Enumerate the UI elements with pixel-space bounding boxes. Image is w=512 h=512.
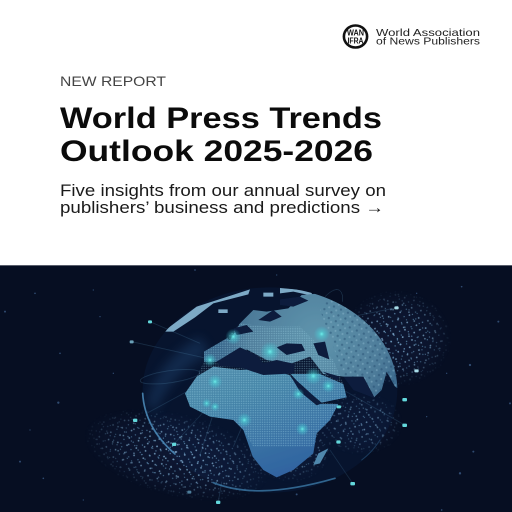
continent: Arabia	[291, 374, 347, 403]
title	[60, 102, 382, 168]
subtitle: publishers’ business and predictions →	[60, 198, 384, 217]
title: Outlook 2025-2026	[60, 135, 373, 168]
logo: WAN-IFRA: IFRA	[348, 36, 364, 46]
subtitle	[60, 181, 386, 217]
glowing nodes on land	[202, 326, 335, 436]
continent: Africa	[185, 367, 338, 477]
network lines	[132, 290, 405, 502]
land masses	[163, 288, 417, 477]
logo: WAN-IFRA: of News Publishers	[376, 36, 480, 48]
background stars	[4, 269, 511, 511]
globe image panel	[0, 265, 512, 512]
logo: WAN-IFRA	[344, 26, 480, 48]
subtitle: Five insights from our annual survey on	[60, 181, 386, 200]
logo: WAN-IFRA: World Association	[376, 27, 480, 39]
outer satellite nodes	[130, 306, 419, 504]
globe body	[143, 287, 397, 493]
label: new report: NEW REPORT	[60, 73, 166, 89]
seas: Mediterranean, Black Sea, Caspian, Red Sea	[217, 297, 375, 405]
left haze swoosh	[147, 337, 210, 410]
dot grid over lands	[185, 323, 347, 447]
texture: mottled Asia	[320, 300, 396, 397]
continent: Europe and Asia	[204, 294, 398, 398]
particle clouds	[88, 292, 449, 499]
island: Madagascar	[313, 448, 328, 465]
lower globe rim	[143, 393, 380, 491]
logo: WAN-IFRA: WAN	[347, 28, 364, 38]
header panel	[60, 24, 480, 217]
continent: Greenland and north	[163, 288, 313, 332]
title: World Press Trends	[60, 102, 382, 135]
